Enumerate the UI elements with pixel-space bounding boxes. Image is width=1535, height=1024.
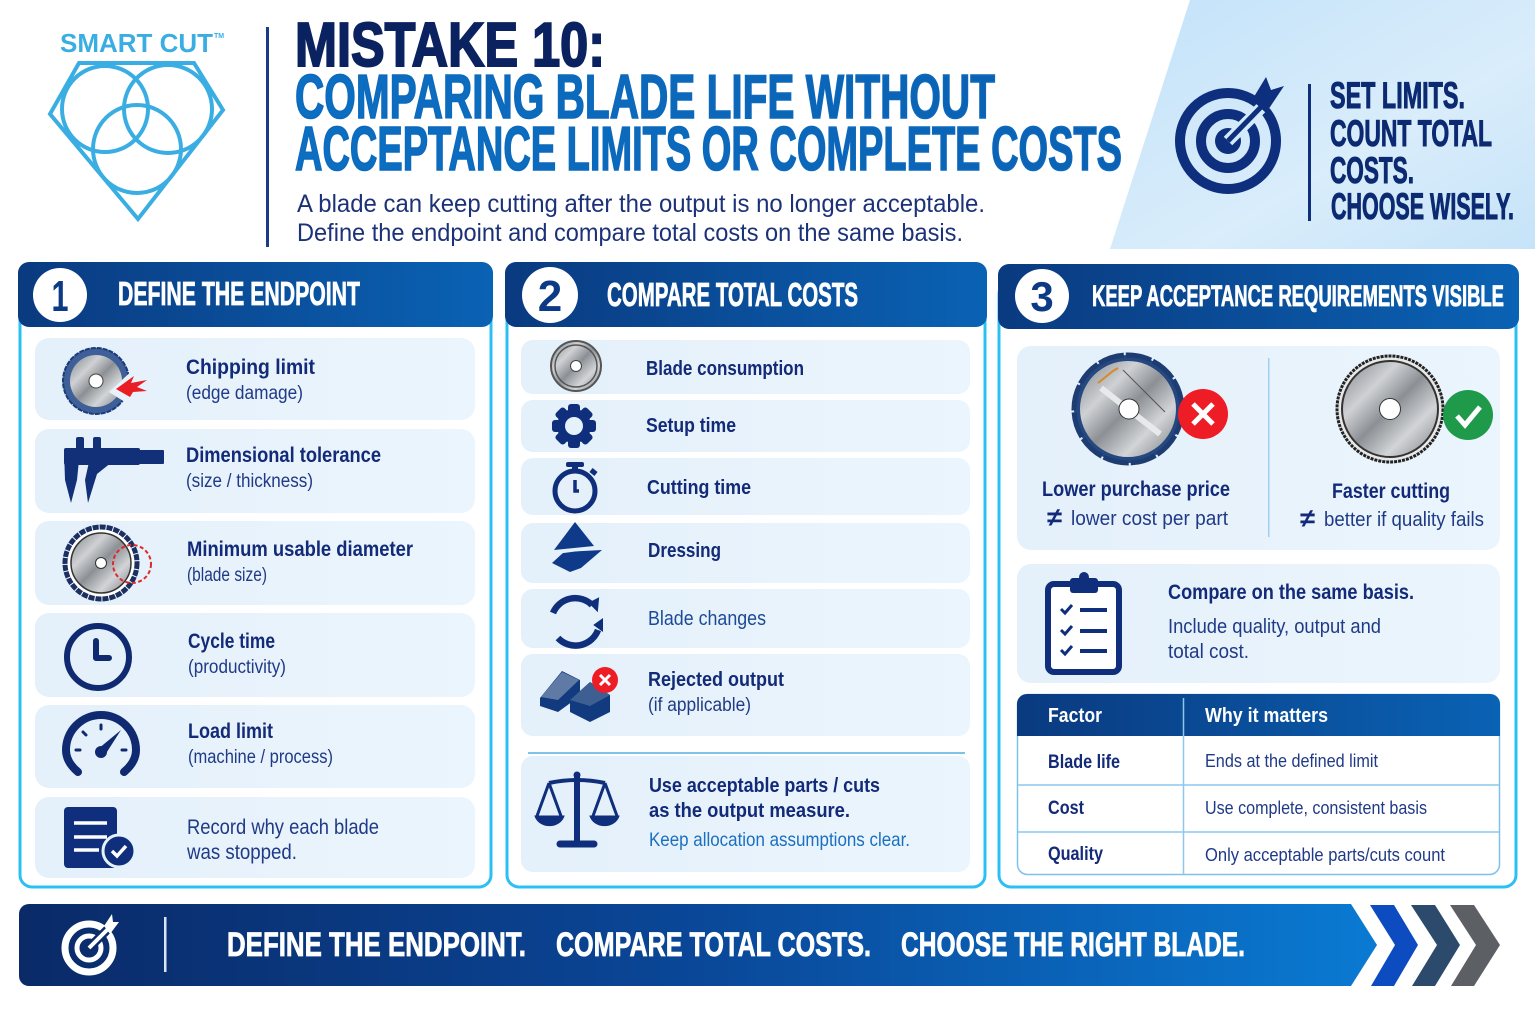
row: load limit [35,705,475,788]
icon: gear [552,404,596,448]
callout: output measure [521,756,970,872]
table: factor and why it matters: Ends at the defined limit [1205,751,1378,771]
row: blade consumption [521,340,970,394]
callout: output measure: as the output measure. [649,799,850,822]
row: cycle time [35,613,475,697]
icon: good blade [1337,356,1443,462]
panel 2 header: 2 [538,272,562,321]
panel 3 header [998,264,1519,329]
card: price and speed comparison: Faster cutting [1332,480,1450,503]
bottom banner [19,904,1500,986]
row: dimensional tolerance: (size / thickness) [186,471,313,492]
row: cycle time: Cycle time [188,630,275,653]
card: price and speed comparison [1017,346,1500,550]
callout: output measure: Use acceptable parts / cuts [649,774,880,797]
row: chipping limit: (edge damage) [186,383,303,404]
row: dimensional tolerance [35,429,475,513]
panel 3: keep acceptance requirements visible [998,264,1519,887]
card: price and speed comparison: lower cost per part [1071,508,1228,530]
panel 2 header [505,262,987,327]
row: cutting time: Cutting time [647,477,751,499]
icon: stopwatch [555,462,596,511]
card: price and speed comparison: ≠ [1047,502,1062,532]
table: factor and why it matters [1017,694,1500,875]
header divider [266,27,269,247]
callout: output measure: Keep allocation assumptions clear. [649,829,910,851]
icon: worn blade [65,527,151,599]
row: record why: Record why each blade [187,816,379,839]
row: dressing: Dressing [648,540,721,562]
panel 1 header: 1 [52,272,68,321]
row: dimensional tolerance: Dimensional tolerance [186,444,381,467]
row: setup time: Setup time [646,415,736,437]
icon: document with check [64,807,135,868]
icon: rejected parts [540,667,618,722]
table: factor and why it matters: Factor [1048,705,1102,727]
card: price and speed comparison: Lower purchase price [1042,478,1230,501]
panel 2 header: COMPARE TOTAL COSTS [607,276,858,313]
title: COMPARING BLADE LIFE WITHOUT [295,63,995,132]
row: load limit: (machine / process) [188,747,333,768]
row: record why: was stopped. [186,841,297,864]
icon: gauge [66,715,136,772]
table: factor and why it matters: Use complete, consistent basis [1205,798,1427,818]
title: MISTAKE 10: [295,11,605,80]
table: factor and why it matters: Cost [1048,798,1085,819]
logo: Smart Cut: SMART CUT [60,30,213,58]
row: record why [35,797,475,878]
row: rejected output: (if applicable) [648,695,751,716]
panel 2: compare total costs [505,262,987,887]
card: compare on the same basis: total cost. [1168,641,1249,663]
icon: caliper [64,437,164,503]
row: cycle time: (productivity) [188,657,286,678]
card: compare on the same basis [1017,564,1500,683]
banner text: DEFINE THE ENDPOINT. [227,926,526,964]
icon: cycle arrows [553,598,602,646]
slogan text: COSTS. [1330,150,1414,191]
icon: target with arrow [1180,77,1284,189]
panel 3 header: 3 [1030,273,1054,320]
icon: green check [1443,390,1493,440]
panel: slogan [1110,0,1535,249]
banner text [227,926,1245,964]
table: factor and why it matters: Quality [1048,844,1103,865]
row: chipping limit: Chipping limit [186,356,315,379]
chevron arrows [1370,905,1500,986]
row: minimum usable diameter [35,521,475,605]
icon: chipped blade [63,348,147,414]
row: rejected output [521,654,970,736]
row: dressing [521,522,970,583]
table: factor and why it matters: Only acceptable parts/cuts count [1205,845,1445,865]
logo: Smart Cut [50,30,224,219]
subtitle: A blade can keep cutting after the output is no longer acceptable. [297,190,985,218]
row: blade changes [521,589,970,648]
icon: damaged blade [1074,355,1182,463]
row: cutting time [521,458,970,515]
logo: Smart Cut: TM [214,33,224,40]
row: blade changes: Blade changes [648,608,766,630]
icon: clock [67,626,129,688]
row: load limit: Load limit [188,720,273,743]
icon: clipboard checklist [1048,572,1119,672]
panel 1 header [18,262,493,327]
row: blade consumption: Blade consumption [646,358,804,380]
subtitle: Define the endpoint and compare total costs on the same basis. [297,219,963,247]
card: price and speed comparison: ≠ [1300,503,1315,533]
banner text: CHOOSE THE RIGHT BLADE. [901,926,1245,964]
table: factor and why it matters: Blade life [1048,752,1120,773]
icon: blade [551,341,601,391]
panel 1 header: DEFINE THE ENDPOINT [118,275,360,312]
row: minimum usable diameter: (blade size) [187,565,267,586]
row: chipping limit [35,338,475,420]
panel 1: define the endpoint [18,262,493,887]
slogan text [1330,75,1514,227]
icon: dressing stone [552,522,602,572]
icon: scales [535,772,619,847]
card: price and speed comparison: better if quality fails [1324,509,1484,531]
subtitle [297,190,985,247]
card: compare on the same basis: Compare on the same basis. [1168,581,1414,604]
table: factor and why it matters: Why it matters [1205,705,1328,727]
title [295,11,1122,184]
icon: white target [65,914,119,972]
banner text: COMPARE TOTAL COSTS. [556,926,871,964]
row: setup time [521,400,970,452]
icon: red cross [1178,389,1228,439]
row: rejected output: Rejected output [648,669,784,691]
row: minimum usable diameter: Minimum usable diameter [187,538,413,561]
card: compare on the same basis: Include quality, output and [1168,616,1381,638]
